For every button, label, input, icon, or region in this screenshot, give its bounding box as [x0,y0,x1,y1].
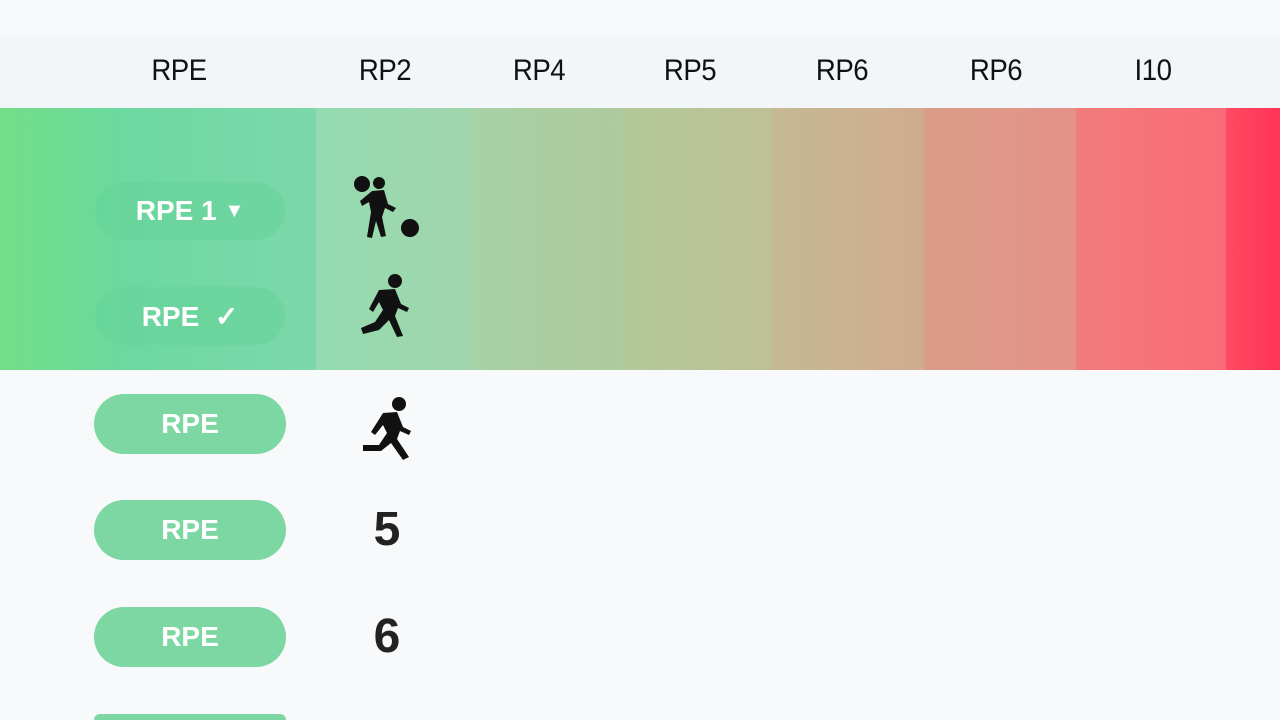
header labels: RP2 [359,54,411,87]
number 6: 6 [374,610,400,663]
icon: person with balls [354,176,419,238]
pill: RPE check [95,287,285,345]
header labels: I10 [1134,54,1172,87]
number 5: 5 [374,503,400,556]
header labels: RP4 [513,54,565,87]
header labels: RP6 [816,54,868,87]
pill: RPE row 4 [94,500,286,560]
pill: RPE check: RPE ✓ [142,300,238,332]
pill: RPE row 5 [94,607,286,667]
header row [0,37,1280,108]
pill: RPE row 3 [94,394,286,454]
pill: RPE row 5: RPE [161,621,219,652]
pill: RPE row 4: RPE [161,514,219,545]
pill: RPE row 3: RPE [161,408,219,439]
header labels: RPE [151,54,207,87]
pill: RPE 1: RPE 1 [136,195,217,226]
pill: RPE row 6 (partial) [94,714,286,720]
gradient scale band [0,108,1280,370]
icon: walking person [361,274,409,337]
header labels: RP5 [664,54,716,87]
icon: running person [363,397,411,460]
pill: RPE 1: ▼ [224,200,244,222]
header labels [151,54,1172,87]
header labels: RP6 [970,54,1022,87]
pill: RPE 1 [95,182,285,240]
